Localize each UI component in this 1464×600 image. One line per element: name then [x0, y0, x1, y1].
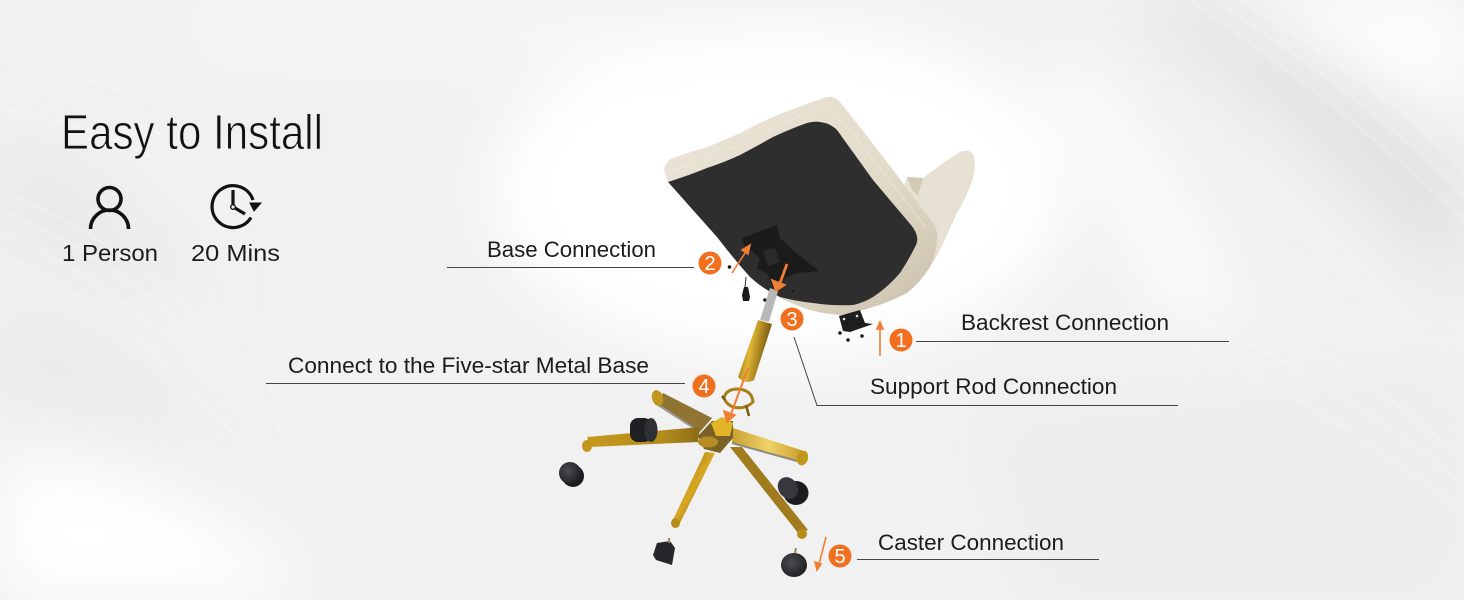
- caster: right: [774, 473, 808, 505]
- caster: bottom middle: [653, 538, 675, 565]
- icon: clock with arrow: [212, 186, 261, 228]
- callout 4: Connect to the Five-star Metal Base: 4: [698, 376, 710, 398]
- gold ring connector: [722, 389, 753, 416]
- caster: far left: [559, 462, 584, 487]
- seam on cushion: [672, 108, 925, 226]
- caster: bottom right: [781, 548, 807, 577]
- callout 3: Support Rod Connection: 3: [786, 309, 798, 331]
- callout 3: Support Rod Connection: Support Rod Connection: [870, 374, 1117, 399]
- title: Easy to Install: [61, 106, 323, 160]
- label: 1 Person: 1 Person: [62, 240, 158, 266]
- seat cushion: [664, 97, 938, 315]
- callout 3: Support Rod Connection: [780, 308, 1178, 406]
- callout 4: Connect to the Five-star Metal Base: [266, 353, 716, 398]
- orange arrows: [724, 245, 883, 570]
- callout 5: Caster Connection: Caster Connection: [878, 530, 1064, 555]
- five-star metal base: [582, 389, 810, 539]
- icon: person: [90, 188, 128, 229]
- gas lift support rod: [738, 288, 778, 382]
- label: 20 Mins: 20 Mins: [191, 240, 280, 266]
- backrest bracket with screws: [838, 310, 873, 342]
- backrest: [890, 151, 975, 293]
- casters: [559, 418, 808, 577]
- hardware: screws and lever: [728, 265, 794, 302]
- callout 1: Backrest Connection: [890, 310, 1229, 352]
- chair seat and backrest: [664, 97, 975, 315]
- callout 2: Base Connection: 2: [704, 253, 716, 275]
- callout 1: Backrest Connection: Backrest Connection: [961, 310, 1169, 335]
- mount plate: [742, 225, 819, 288]
- callout 2: Base Connection: Base Connection: [487, 237, 656, 262]
- callout 5: Caster Connection: 5: [834, 546, 846, 568]
- seat underside: [668, 122, 917, 305]
- callout 1: Backrest Connection: 1: [895, 330, 907, 352]
- caster: upper left: [630, 418, 658, 442]
- callout 5: Caster Connection: [828, 530, 1099, 568]
- callout 2: Base Connection: [447, 237, 722, 275]
- callout 4: Connect to the Five-star Metal Base: Connect to the Five-star Metal Base: [288, 353, 649, 378]
